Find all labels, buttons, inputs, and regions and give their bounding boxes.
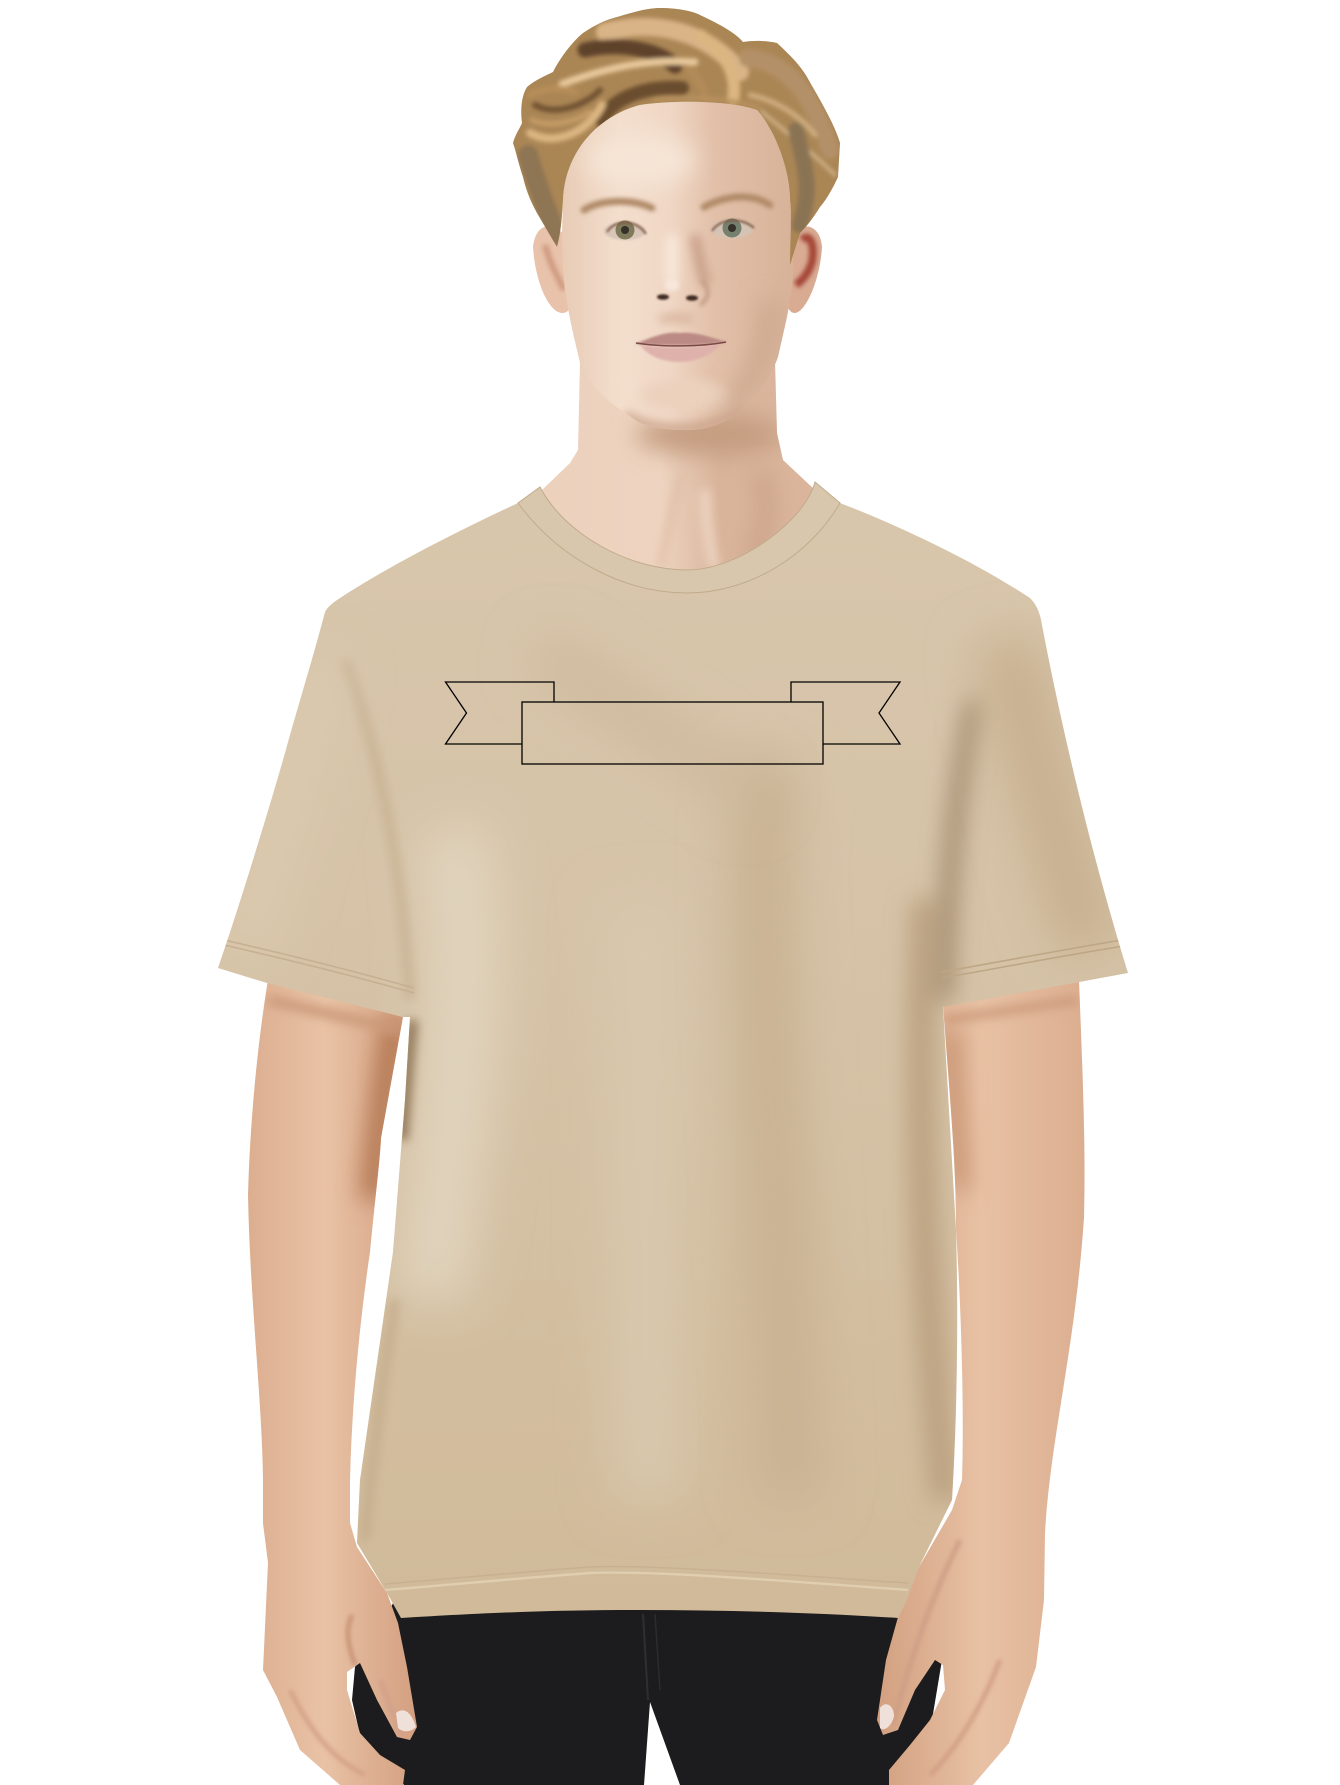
t-shirt collar ribbing (518, 482, 840, 593)
eyes (604, 218, 754, 240)
ribbon banner (446, 682, 900, 764)
right arm and hand (877, 980, 1085, 1785)
left ribbon tail (446, 682, 554, 744)
eyebrows (584, 197, 770, 210)
black trousers (352, 1600, 942, 1785)
mouth (635, 333, 727, 362)
neck (542, 360, 815, 570)
armhole shadows (944, 700, 975, 1000)
ribbon centre panel (522, 702, 823, 764)
t-shirt (218, 482, 1128, 1618)
body light and shadow folds (430, 830, 464, 1300)
face (562, 102, 794, 430)
sleeve tones (1005, 640, 1090, 950)
hair (513, 8, 840, 265)
ears (533, 226, 822, 313)
mockup: man wearing beige t-shirt with ribbon banner (218, 8, 1128, 1785)
right ribbon tail (791, 682, 900, 744)
hem and cuff stitching (224, 940, 414, 988)
nose (657, 279, 708, 305)
left arm and hand (248, 980, 417, 1785)
